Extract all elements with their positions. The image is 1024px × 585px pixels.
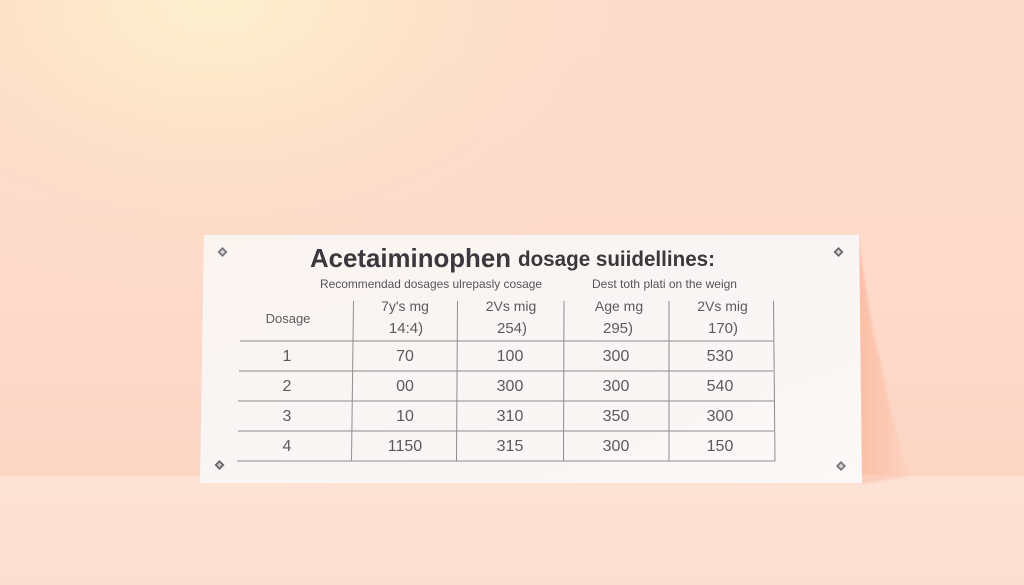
row 2: 540 [707, 378, 733, 395]
row 2: 300 [497, 378, 523, 395]
panel: dosage guidelines card [200, 235, 862, 483]
row 2: 00 [396, 378, 414, 395]
row 4: 1150 [388, 438, 422, 455]
row 4: 300 [603, 438, 629, 455]
row 3 [283, 408, 733, 425]
subtitle left: Recommendad dosages ulrepasly cosage [320, 277, 542, 291]
table rows [283, 348, 733, 455]
row 4: 315 [497, 438, 523, 455]
row 4: 4 [283, 438, 292, 455]
row 1: 1 [283, 348, 292, 365]
row 3: 350 [603, 408, 629, 425]
row 3: 310 [497, 408, 523, 425]
table header: 254) [497, 320, 527, 337]
row 2 [283, 378, 733, 395]
row 3: 300 [707, 408, 733, 425]
title: Acetaiminophen [310, 243, 511, 273]
table header: 7y's mg [381, 298, 429, 314]
table header: 2Vs mig [697, 298, 748, 314]
subtitle right: Dest toth plati on the weign [592, 277, 737, 291]
icon: corner mark bottom left [214, 460, 224, 470]
table header: 14:4) [389, 320, 423, 337]
floor shadow [860, 476, 908, 484]
row 3: 10 [396, 408, 414, 425]
icon: corner mark top right [834, 247, 844, 257]
row 4: 150 [707, 438, 733, 455]
icon: corner mark bottom right [836, 461, 846, 471]
row 1: 300 [603, 348, 629, 365]
row 3: 3 [283, 408, 292, 425]
table header: 2Vs mig [486, 298, 536, 314]
row 1 [283, 348, 733, 365]
floor [0, 476, 1024, 585]
table header: Dosage [266, 311, 310, 326]
row 1: 100 [497, 348, 523, 365]
table header: 295) [603, 320, 633, 337]
row 4 [283, 438, 733, 455]
row 2: 2 [283, 378, 292, 395]
panel shadow [858, 238, 909, 476]
title: dosage suiidellines: [518, 248, 715, 271]
icon: corner mark top left [218, 247, 228, 257]
table header: 170) [708, 320, 738, 337]
row 1: 70 [396, 348, 414, 365]
table header [266, 298, 748, 337]
table header: Age mg [595, 298, 643, 314]
row 2: 300 [603, 378, 629, 395]
table grid [237, 301, 775, 461]
row 1: 530 [707, 348, 733, 365]
